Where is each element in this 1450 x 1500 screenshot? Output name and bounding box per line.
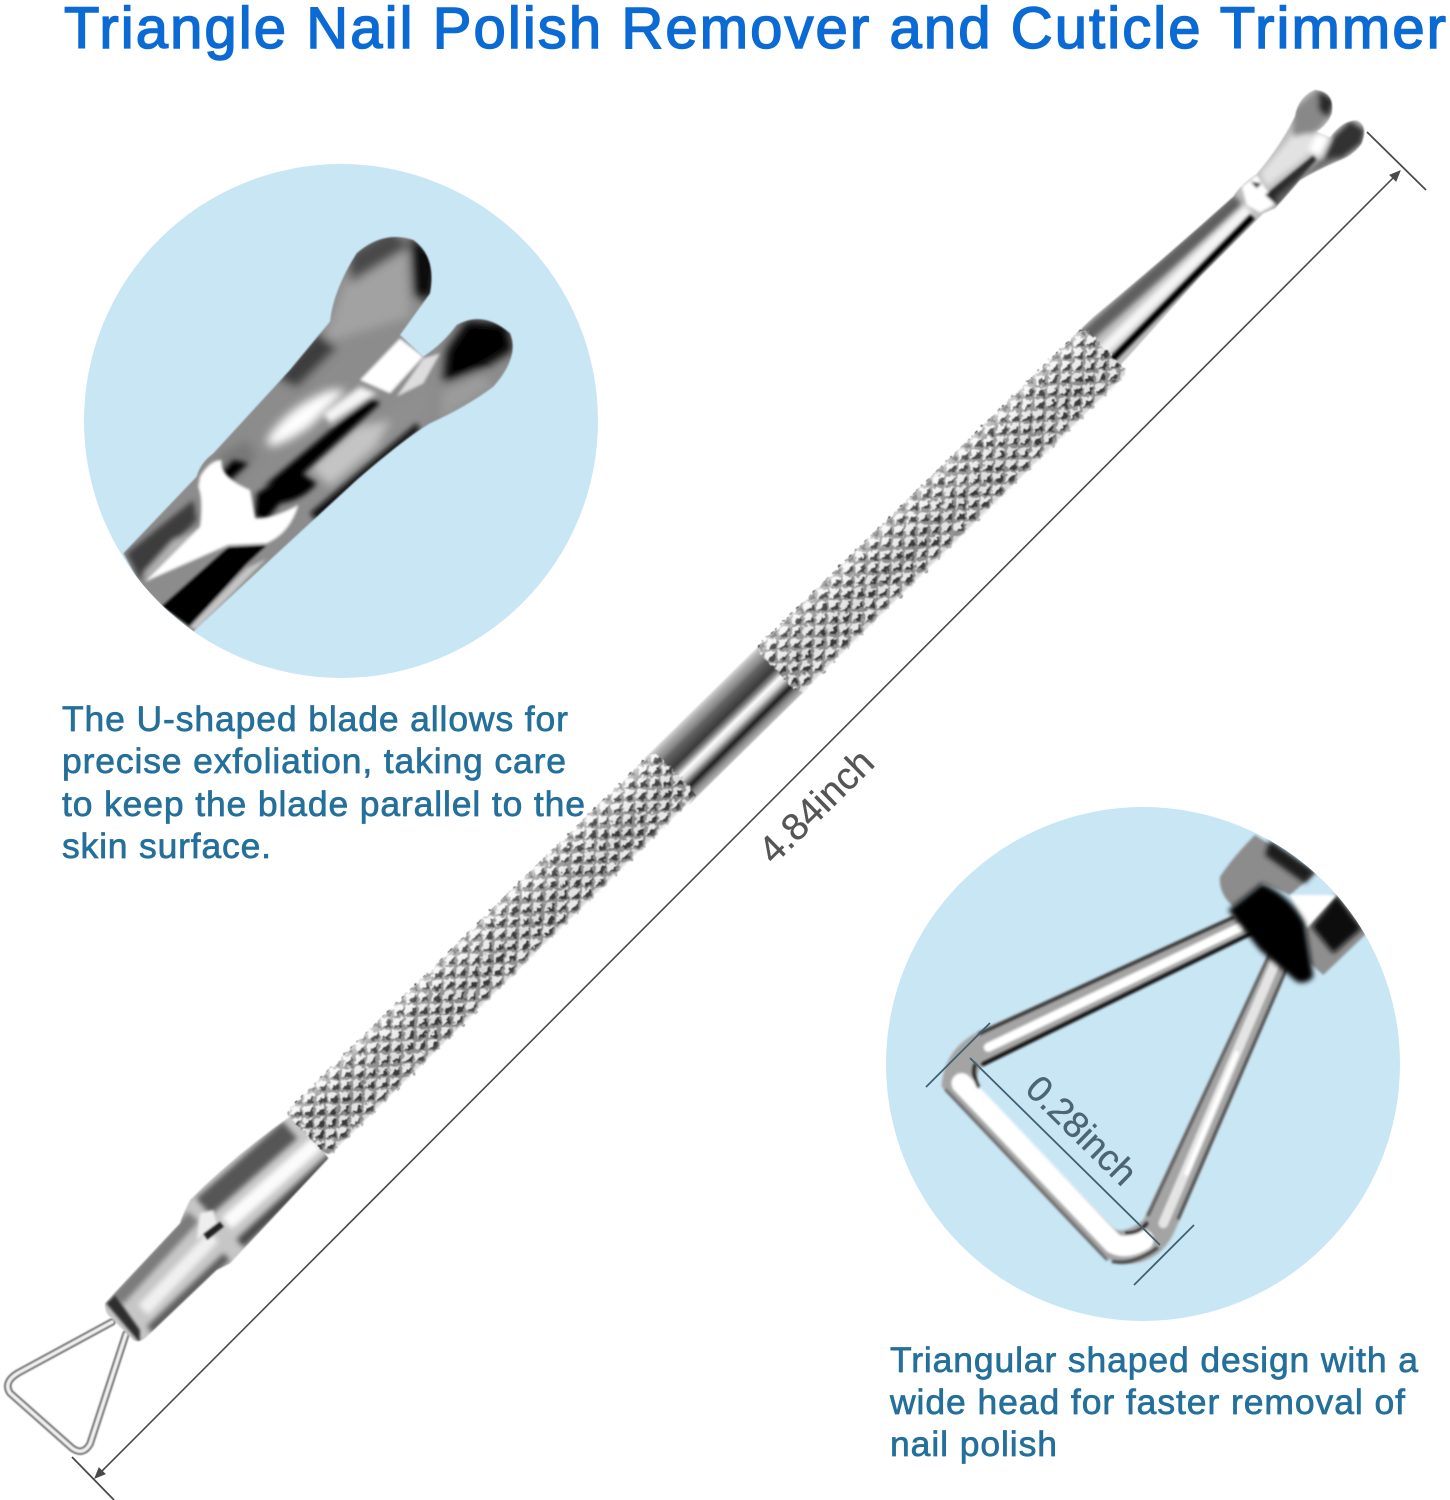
text block: U-shaped blade description: precise exfoliation, taking care xyxy=(62,741,566,781)
text block: U-shaped blade description: The U-shaped blade allows for xyxy=(62,699,568,739)
circle background: left xyxy=(84,164,598,678)
dimension lines: 0.28inch xyxy=(926,1023,1194,1285)
text block: triangular head description: wide head for faster removal of xyxy=(889,1382,1405,1422)
middle smooth section xyxy=(645,643,807,804)
wire triangle tip xyxy=(8,1322,126,1451)
icon: U-shaped blade enlarged xyxy=(122,236,514,632)
text block: U-shaped blade description xyxy=(62,699,585,866)
label: 0.28inch: 0.28inch xyxy=(1018,1067,1145,1193)
text block: U-shaped blade description: to keep the blade parallel to the xyxy=(62,784,585,824)
wire: triangle loop xyxy=(942,915,1288,1264)
text block: triangular head description xyxy=(889,1340,1418,1464)
panel: triangle head close-up circle xyxy=(886,807,1400,1321)
collar xyxy=(1220,835,1367,983)
circle background: right xyxy=(886,807,1400,1321)
handle: knurled grip and middle section xyxy=(285,327,1128,1158)
knurled grip: lower xyxy=(285,751,697,1157)
white sheen xyxy=(267,390,347,447)
panel: U-shaped blade close-up circle xyxy=(84,164,598,678)
knurled grip: upper xyxy=(755,327,1128,695)
text block: U-shaped blade description: skin surface. xyxy=(62,826,271,866)
icon: triangle head enlarged xyxy=(942,835,1367,1264)
U-shaped blade tip xyxy=(1080,89,1365,364)
text block: triangular head description: Triangular shaped design with a xyxy=(890,1340,1418,1380)
text block: triangular head description: nail polish xyxy=(890,1424,1057,1464)
label: 4.84inch: 4.84inch xyxy=(751,741,883,872)
lower neck xyxy=(104,1116,329,1342)
